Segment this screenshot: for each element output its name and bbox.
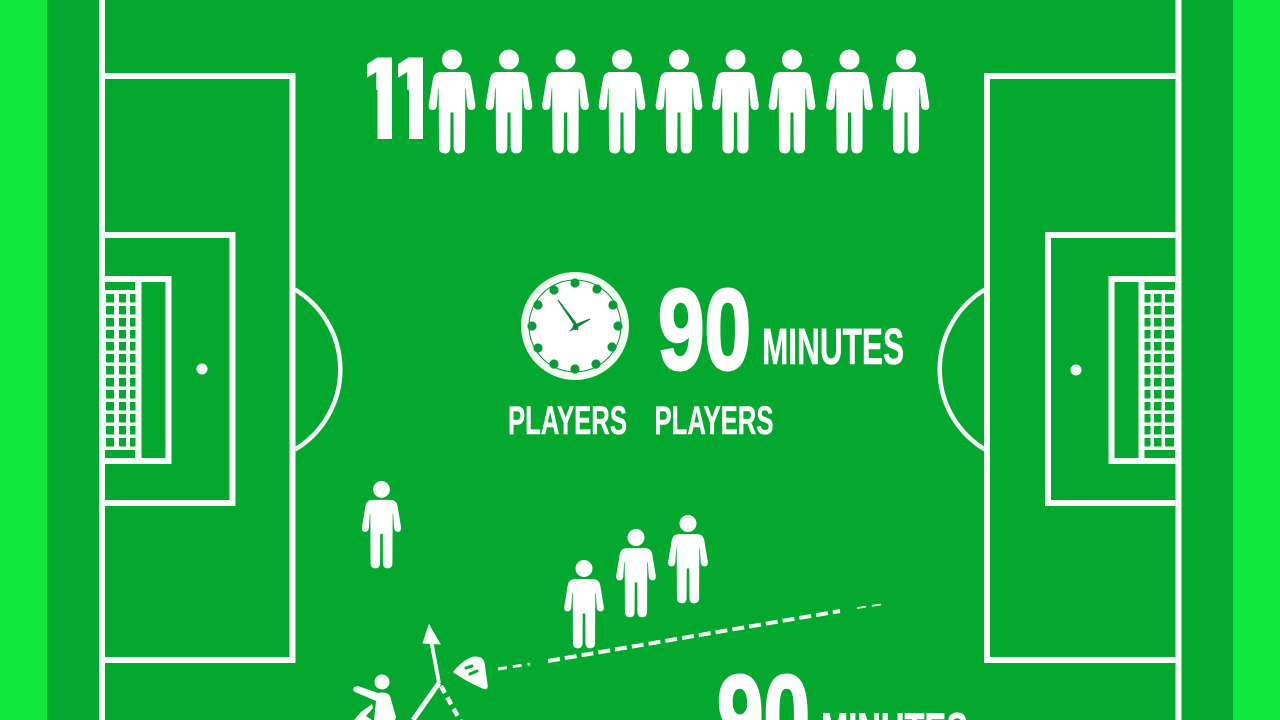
right six-yard box	[1048, 235, 1176, 503]
single player	[362, 481, 401, 568]
label: players right: PLAYERS	[654, 399, 774, 443]
number of players: 11: 11	[349, 33, 446, 165]
big number 90: 90	[658, 267, 751, 394]
left penalty area	[105, 76, 340, 660]
left touchline	[99, 0, 105, 720]
clock hour markers	[527, 278, 623, 374]
left penalty arc	[295, 290, 340, 450]
left penalty spot	[196, 364, 208, 374]
left penalty box	[105, 76, 292, 660]
left six-yard box	[105, 235, 232, 503]
right penalty spot	[1070, 364, 1082, 376]
dashed ball trajectory	[498, 604, 884, 669]
right penalty arc	[940, 290, 985, 450]
left goal frame	[105, 279, 168, 461]
left goal net	[105, 276, 139, 464]
solid branch	[413, 683, 439, 720]
icon: boot	[454, 657, 487, 689]
dashed branch	[441, 686, 461, 720]
right goal net	[1140, 276, 1176, 464]
group of three players	[564, 515, 708, 648]
right goal frame	[1112, 279, 1176, 461]
right penalty box	[987, 76, 1176, 660]
icon: clock	[521, 272, 629, 380]
label: minutes: MINUTES	[762, 318, 904, 375]
right touchline	[1176, 0, 1182, 720]
right penalty area	[940, 76, 1176, 660]
kicking player	[353, 674, 396, 720]
clock hands	[558, 300, 590, 331]
label: players left: PLAYERS	[508, 399, 627, 443]
arrow up	[431, 640, 439, 683]
pass direction arrows	[413, 625, 461, 720]
row of player icons	[429, 50, 929, 154]
